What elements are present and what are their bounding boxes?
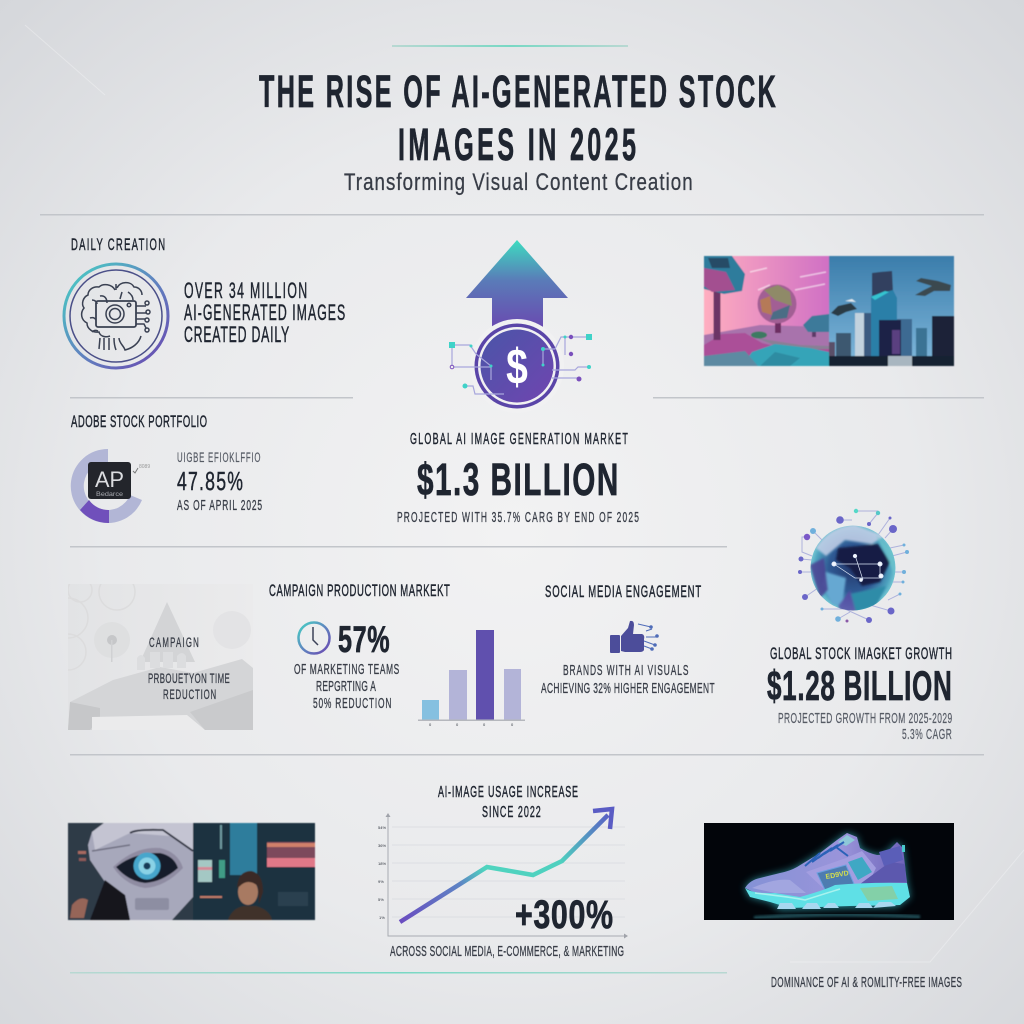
bar chart: 0: [456, 722, 459, 727]
bar chart: [418, 630, 525, 727]
image: low-poly landscape and futuristic city: [704, 256, 954, 366]
panel: campaign production time reduction image: [68, 584, 253, 730]
panel: AI-image usage increase: [378, 782, 628, 960]
panel: daily creation: [64, 235, 345, 368]
title: THE RISE OF AI-GENERATED STOCK: [259, 66, 776, 117]
line chart: 5%: [378, 897, 384, 902]
heading: usage increase since 2022: [438, 782, 578, 821]
panel: global stock market growth: [767, 509, 952, 743]
bar chart: 0: [429, 722, 432, 727]
note: brands engagement: [541, 661, 715, 697]
label: global stock market growth: GLOBAL STOCK IMAGKET GROWTH: [770, 644, 952, 663]
note: projected CAGR: PROJECTED WITH 35.7% CARG BY END OF 2025: [397, 508, 639, 526]
label: campaign production time reduction: REDUCTION: [163, 688, 216, 703]
stat text: 34 million: CREATED DAILY: [184, 322, 289, 347]
note: projected growth: 5.3% CAGR: [902, 725, 952, 743]
note: projected growth: [778, 709, 952, 743]
heading: usage increase since 2022: SINCE 2022: [482, 802, 541, 821]
adobe badge: Bedarce: [96, 491, 123, 498]
icon: growth arrow with dollar coin: $: [506, 338, 528, 395]
caption: dominance of AI and royalty-free images: DOMINANCE OF AI & ROMLITY-FREE IMAGES: [771, 975, 962, 991]
panel: adobe stock portfolio: [71, 412, 262, 523]
icon: network globe: [798, 509, 909, 623]
label: campaign production time reduction: CAMPAIGN: [149, 636, 199, 651]
bar chart: 0: [511, 722, 514, 727]
note: brands engagement: ACHIEVING 32% HIGHER ENGAGEMENT: [541, 679, 715, 697]
stat text: 47.85%: 47.85%: [177, 467, 243, 496]
note: projected growth: PROJECTED GROWTH FROM 2025-2029: [778, 709, 952, 727]
image: low-poly landscape: [704, 256, 829, 366]
panel: global AI image generation market: [397, 240, 639, 526]
heading: usage increase since 2022: AI-IMAGE USAGE INCREASE: [438, 782, 578, 801]
stat text: 47.85%: [177, 451, 262, 514]
value: $1.3 billion: $1.3 BILLION: [417, 455, 618, 506]
note: brands engagement: BRANDS WITH AI VISUALS: [563, 661, 688, 679]
line chart: 9%: [378, 879, 384, 884]
heading: daily creation: DAILY CREATION: [71, 235, 165, 254]
line chart: 36%: [378, 843, 386, 848]
title: [259, 66, 776, 170]
icon: clock: [298, 622, 330, 654]
note: marketing teams: 50% REDUCTION: [313, 694, 391, 712]
icon: thumbs up: [610, 621, 658, 653]
donut chart: 8089: [139, 464, 150, 470]
panel: campaign production market: [269, 581, 525, 727]
stat text: 34 million: OVER 34 MILLION: [184, 278, 307, 303]
label: campaign production time reduction: [148, 636, 230, 703]
icon: growth arrow with dollar coin: [449, 240, 592, 413]
note: marketing teams: [294, 660, 399, 712]
heading: campaign production market: CAMPAIGN PRODUCTION MARKEKT: [269, 581, 450, 600]
image: futuristic city: [829, 256, 954, 366]
stat text: 47.85%: AS OF APRIL 2025: [177, 496, 262, 514]
heading: adobe stock portfolio: ADOBE STOCK PORTFOLIO: [71, 412, 207, 431]
line chart: 18%: [378, 861, 386, 866]
donut chart: [71, 449, 150, 523]
image: glowing sneaker: [704, 823, 954, 920]
title: IMAGES IN 2025: [398, 119, 636, 170]
sneaker sole: [745, 883, 910, 908]
label: global AI image generation market: GLOBAL AI IMAGE GENERATION MARKET: [410, 429, 628, 448]
value: 57%: 57%: [338, 618, 390, 660]
image: robot eye: [68, 823, 193, 920]
subtitle: Transforming Visual Content Creation: [344, 169, 693, 196]
line chart: 1%: [379, 915, 385, 920]
line chart: [378, 809, 628, 938]
image: woman at screens: [193, 823, 315, 920]
note: marketing teams: OF MARKETING TEAMS: [294, 660, 399, 678]
adobe badge: [88, 462, 131, 499]
stat text: 34 million: AI-GENERATED IMAGES: [184, 300, 345, 325]
stat text: 34 million: [184, 278, 345, 347]
bar chart: 0: [483, 722, 486, 727]
note: across channels: ACROSS SOCIAL MEDIA, E-COMMERCE, & MARKETING: [390, 942, 624, 960]
heading: social media engagement: SOCIAL MEDIA ENGAGEMENT: [545, 582, 702, 601]
stat text: 47.85%: UIGBE EFIOKLFFIO: [177, 451, 261, 466]
panel: social media engagement: [541, 582, 715, 697]
note: marketing teams: REPGRTING A: [316, 677, 377, 695]
sneaker upper: [745, 833, 907, 897]
label: campaign production time reduction: PRBOUETYON TIME: [148, 672, 230, 687]
value: +300%: +300%: [515, 892, 613, 937]
image: robot eye and woman at control screens: [68, 823, 315, 920]
value: $1.28 billion: $1.28 BILLION: [767, 663, 952, 710]
adobe badge: AP: [95, 467, 124, 492]
icon: AI brain camera: [64, 264, 168, 368]
image: glowing sneaker: ED9VD: [825, 870, 849, 881]
line chart: 54%: [378, 825, 386, 830]
